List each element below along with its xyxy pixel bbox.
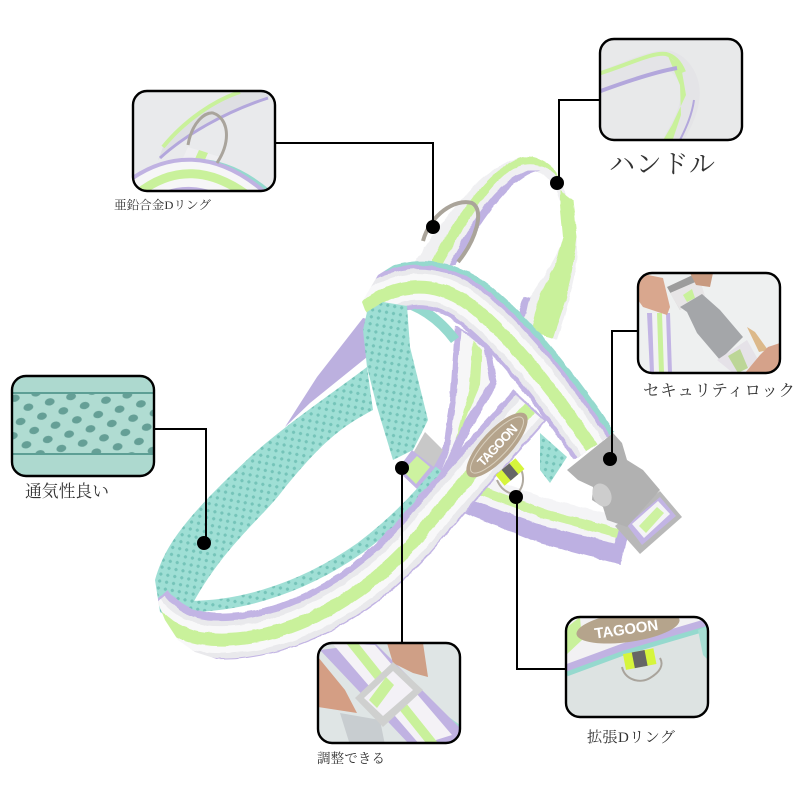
small teal flap	[540, 433, 567, 483]
lower strap with lavender back	[470, 488, 625, 548]
buckle	[567, 433, 682, 554]
lavender back strap	[285, 318, 372, 427]
metal D-ring	[423, 202, 478, 262]
panel: alloy D-ring	[132, 90, 276, 192]
neck strap	[350, 283, 596, 448]
label: alloy D-ring: 亜鉛合金Dリング	[114, 197, 211, 212]
reflective tag and small ring	[496, 458, 524, 494]
teal edge of chest strap	[165, 470, 440, 606]
label: security lock: セキュリティロック	[643, 381, 795, 400]
label: expansion D-ring: 拡張Dリング	[587, 729, 675, 746]
upper mesh strap	[155, 367, 373, 625]
connector lines	[154, 100, 638, 669]
panel: expansion D-ring	[566, 605, 708, 717]
panel: expansion D-ring: TAGOON	[593, 617, 659, 643]
slider strap piece	[397, 432, 443, 490]
chest strap	[150, 405, 530, 640]
mesh flap	[363, 302, 428, 460]
label: breathable: 通気性良い	[25, 482, 109, 501]
TAGOON oval badge	[457, 404, 537, 486]
label: handle: ハンドル	[609, 150, 715, 179]
panel: breathable mesh	[12, 376, 154, 476]
panel: security lock	[638, 273, 780, 373]
label: adjustable: 調整できる	[317, 750, 385, 766]
handle loop	[413, 157, 577, 340]
TAGOON oval badge: TAGOON	[474, 421, 521, 469]
panel: handle	[598, 39, 742, 142]
panel: adjustable	[318, 643, 460, 745]
descending strap	[430, 325, 497, 478]
teal under-edge near shoulder	[395, 300, 455, 340]
anchor dots	[197, 176, 617, 550]
harness product	[150, 157, 682, 640]
